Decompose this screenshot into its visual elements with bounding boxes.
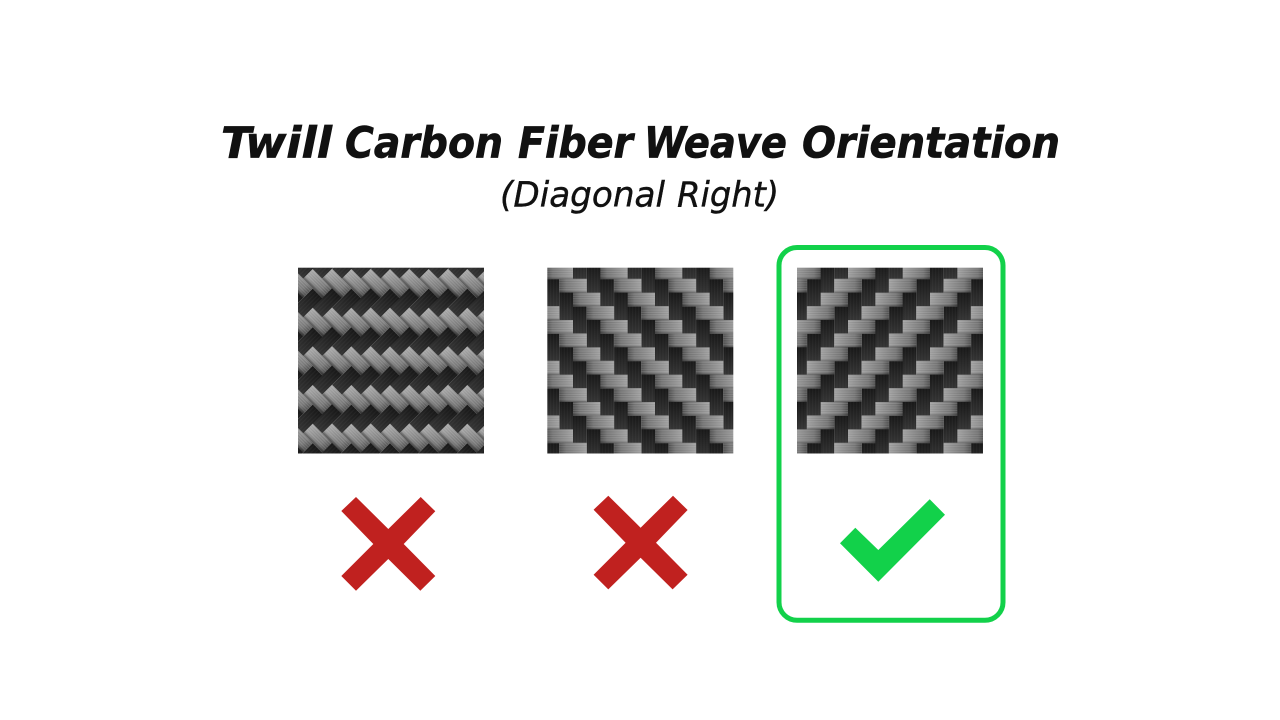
- subtitle: Right): [677, 176, 779, 216]
- highlight frame around correct option: [779, 248, 1003, 620]
- title: [221, 120, 1060, 168]
- subtitle: (Diagonal: [500, 176, 665, 216]
- panel: diagonal left weave sample: [547, 268, 733, 454]
- title: Twill: [221, 120, 333, 168]
- icon: red cross under second sample: [594, 496, 688, 589]
- title: Orientation: [802, 120, 1060, 168]
- panel: diagonal right weave sample: [797, 268, 983, 454]
- panel: 45 degree rotated weave sample: [298, 268, 484, 454]
- title: Fiber: [518, 120, 636, 168]
- icon: red cross under first sample: [341, 497, 435, 591]
- subtitle: [500, 176, 779, 216]
- title: Weave: [644, 120, 787, 168]
- icon: green check mark: [840, 499, 945, 582]
- title: Carbon: [345, 120, 503, 168]
